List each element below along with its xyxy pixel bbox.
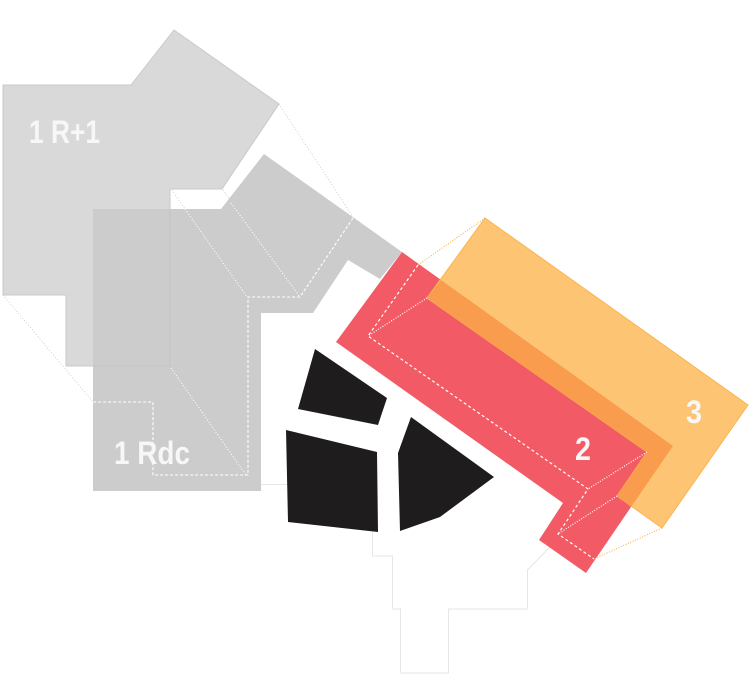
label: 2: 2: [575, 431, 591, 467]
building 1 R+1: upper floor footprint: [3, 30, 279, 366]
label: 3: 3: [686, 394, 702, 430]
upper floor edge over ground floor: [93, 209, 170, 366]
building 2: red footprint: [336, 252, 673, 573]
overlap between buildings 2 and 3: [427, 280, 673, 507]
orange dotted guides: [418, 218, 662, 559]
existing buildings: black blocks: [286, 349, 494, 532]
building 3: orange footprint: [427, 218, 748, 528]
building 2 dashed outline: [368, 265, 594, 559]
label: 1 Rdc: 1 Rdc: [114, 435, 190, 471]
label: 1 R+1: 1 R+1: [29, 114, 100, 150]
ground floor dashed outline: [93, 218, 353, 475]
building 2 dotted projections: [368, 298, 647, 534]
context outline: surrounding site: [261, 484, 550, 673]
dotted guides: gray: [3, 104, 370, 402]
building 1 Rdc: ground floor footprint: [93, 154, 402, 491]
ground floor dotted projections: [171, 203, 300, 475]
